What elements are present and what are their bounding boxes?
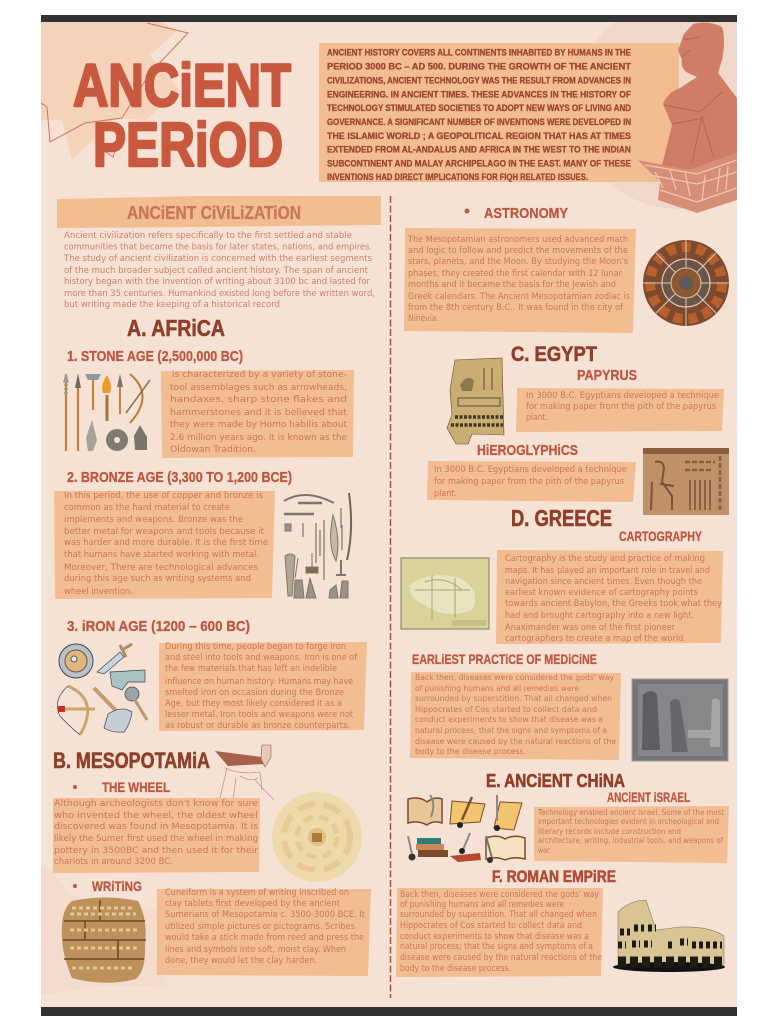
panel: medicine text <box>410 672 621 760</box>
heading: writing: WRiTiNG <box>92 879 142 894</box>
text block: ancient civilization: of the much broader subject called ancient history. The span of ancient <box>64 266 368 276</box>
decorative circle behind statue <box>595 22 737 209</box>
panel: iron age text: influence on human history. Humans may have <box>165 677 353 687</box>
icon: winged bull <box>215 745 274 800</box>
panel: iron age text: lesser metal. Iron tools and weapons were not <box>165 710 354 720</box>
text block: ancient civilization: communities that became the basis for later states, nations, and empires. <box>64 242 372 252</box>
panel: papyrus text: plant. <box>526 413 548 423</box>
panel: papyrus text <box>516 388 724 432</box>
panel: writing text: done, they would let the clay harden. <box>165 956 317 966</box>
heading: astronomy: ASTRONOMY <box>484 205 568 222</box>
panel: writing text: clay tablets first developed by the ancient <box>165 899 341 909</box>
heading: B. Mesopotamia: B. MESOPOTAMiA <box>53 748 210 773</box>
panel: roman empire text: Hippocrates of Cos started to collect data and <box>400 921 582 931</box>
panel: roman empire text: conduct experiments to show that disease was a <box>400 932 589 942</box>
icon: stone tools <box>64 373 150 451</box>
panel: bronze age text <box>54 491 275 599</box>
panel: stone age text: is characterized by a variety of stone- <box>172 370 347 380</box>
title: ANCiENT <box>73 52 291 119</box>
text block: ancient civilization: Ancient civilization refers specifically to the first settled and stable <box>64 231 352 241</box>
panel: introduction: SUBCONTINENT AND MALAY ARCHIPELAGO IN THE EAST. MANY OF THESE <box>327 158 631 168</box>
panel: stone age text <box>161 370 354 458</box>
text block: ancient civilization <box>63 231 375 310</box>
heading: iron age: 3. iRON AGE (1200 – 600 BC) <box>67 618 250 635</box>
panel: medicine text: of punishing humans and all remedies were <box>415 684 579 693</box>
panel: bronze age text: better metal for weapons and tools because it <box>64 527 265 537</box>
decorative leaf shape <box>41 867 170 995</box>
heading: F. Roman Empire: F. ROMAN EMPiRE <box>492 867 616 886</box>
panel: hieroglyphics text <box>427 461 636 502</box>
icon: colosseum <box>613 900 725 972</box>
heading: earliest practice of medicine: EARLiEST PRACTiCE OF MEDiCiNE <box>412 652 597 667</box>
panel: bronze age text: was harder and more durable. It is the first time <box>64 538 268 548</box>
panel: medicine text: body to the disease process. <box>415 747 526 756</box>
panel: roman empire text: surrounded by superstition. That all changed when <box>400 910 597 920</box>
panel: introduction: GOVERNANCE. A SIGNIFICANT NUMBER OF INVENTIONS WERE DEVELOPED IN <box>327 117 631 127</box>
panel: iron age text <box>159 642 367 731</box>
text block: ancient civilization: history began with the invention of writing about 3100 bc and lasted for <box>64 277 370 287</box>
panel: stone age text: 2.6 million years ago. It is known as the <box>170 433 347 443</box>
panel: astronomy text: months and it became the basis for the Jewish and <box>408 280 616 290</box>
panel: astronomy text <box>404 228 636 333</box>
heading: the wheel: THE WHEEL <box>102 780 170 795</box>
panel: astronomy text: and logic to follow and predict the movements of the <box>408 246 628 256</box>
panel: hieroglyphics text: for making paper from the pith of the papyrus <box>434 477 624 487</box>
panel: bronze age text: In this period, the use of copper and bronze is <box>64 491 263 501</box>
panel: hieroglyphics text: In 3000 B.C. Egyptians developed a technique <box>434 465 627 475</box>
panel: astronomy text: Greek calendars. The Ancient Mesopotamian zodiac is <box>408 292 630 302</box>
panel: ancient israel text: literary records include construction and <box>538 827 681 836</box>
panel: astronomy text: Ninevia. <box>408 314 439 324</box>
heading: stone age: 1. STONE AGE (2,500,000 BC) <box>67 348 243 365</box>
heading: A. Africa: A. AFRiCA <box>127 315 225 341</box>
panel: the wheel text: chariots in around 3200 BC. <box>54 857 173 867</box>
icon: medicine relief <box>632 679 728 761</box>
heading: cartography: CARTOGRAPHY <box>619 528 702 544</box>
panel: bronze age text: during this age such as writing systems and <box>64 574 251 584</box>
panel: the wheel text: likely the Sumer first used the wheel in making <box>54 834 258 844</box>
panel: writing text: lines and symbols into soft, moist clay. When <box>165 945 346 955</box>
panel: ancient civilization heading: ANCiENT CiViLiZATiON <box>127 203 301 223</box>
text block: ancient civilization: but writing made the keeping of a historical record <box>64 300 280 310</box>
panel: iron age text: as robust or durable as bronze counterparts. <box>165 721 350 731</box>
panel: stone age text: hammerstones and it is believed that <box>170 408 348 418</box>
heading: C. Egypt: C. EGYPT <box>511 343 597 366</box>
panel: writing text: Sumerians of Mesopotamia c. 3500-3000 BCE. It <box>165 910 366 920</box>
panel: roman empire text: natural process; that the signs and symptoms of a <box>400 942 593 952</box>
title <box>73 52 291 180</box>
panel: the wheel text: who invented the wheel, the oldest wheel <box>54 811 258 821</box>
panel: the wheel text: discovered was found in Mesopotamia. It is <box>54 822 259 832</box>
panel: ancient israel text: important technologies evident in archeological and <box>538 817 719 826</box>
heading: bronze age: 2. BRONZE AGE (3,300 TO 1,200 BCE) <box>67 469 292 486</box>
bottom bar <box>41 1007 737 1016</box>
panel: medicine text: natural process; that the signs and symptoms of a <box>415 726 607 735</box>
panel: cartography text: earliest known evidence of cartography points <box>505 588 698 598</box>
panel: roman empire text: disease were caused by the natural reactions of the <box>400 953 602 963</box>
icon: ancient map <box>401 558 489 629</box>
panel: cartography text: Cartography is the study and practice of making <box>505 554 705 564</box>
panel: writing text <box>157 888 371 976</box>
panel: roman empire text: Back then, diseases were considered the gods' way <box>400 890 599 900</box>
panel: introduction: EXTENDED FROM AL-ANDALUS AND AFRICA IN THE WEST TO THE INDIAN <box>327 144 631 154</box>
icon: hieroglyph relief <box>643 448 729 515</box>
title: PERiOD <box>93 111 283 180</box>
panel: ancient israel text <box>534 806 729 863</box>
panel: iron age text: Age, but they most likely considered it as a <box>165 699 342 709</box>
panel: astronomy text: phases, they created the first calendar with 12 lunar <box>408 269 622 279</box>
icon: papyrus tablet <box>447 358 504 444</box>
panel: stone age text: handaxes, sharp stone flakes and <box>170 395 347 405</box>
panel: introduction: TECHNOLOGY STIMULATED SOCIETIES TO ADOPT NEW WAYS OF LIVING AND <box>327 103 631 113</box>
panel: bronze age text: wheel invention. <box>64 587 133 597</box>
panel: iron age text: smelted iron on occasion during the Bronze <box>165 688 344 698</box>
panel: ancient israel text: architecture, writing, industrial tools, and weapons of <box>538 836 723 845</box>
panel: medicine text: disease were caused by the natural reactions of the <box>415 737 616 746</box>
icon: iron weapons <box>57 644 147 735</box>
panel: introduction: PERIOD 3000 BC – AD 500. DURING THE GROWTH OF THE ANCIENT <box>327 62 632 72</box>
text block: ancient civilization: more than 35 centuries. Humankind existed long before the written word, <box>64 289 375 299</box>
panel: bronze age text: common as the hard material to create <box>64 503 230 513</box>
panel: cartography text: had and brought cartography into a new light. <box>505 611 694 621</box>
heading: the wheel <box>73 780 170 795</box>
panel: bronze age text: Moreover, There are technological advances <box>64 563 258 573</box>
panel: cartography text <box>496 550 723 644</box>
panel: ancient civilization heading <box>57 196 381 228</box>
heading: ancient israel: ANCiENT iSRAEL <box>607 790 690 805</box>
panel: bronze age text: that humans have started working with metal. <box>64 550 259 560</box>
center divider <box>390 196 392 998</box>
panel: medicine text: Hippocrates of Cos started to collect data and <box>415 705 597 714</box>
panel: introduction: ANCIENT HISTORY COVERS ALL CONTINENTS INHABITED BY HUMANS IN THE <box>327 48 631 58</box>
panel: bronze age text: implements and weapons. Bronze was the <box>64 515 243 525</box>
panel: astronomy text: stars, planets, and the Moon. By studying the Moon's <box>408 257 628 267</box>
panel: iron age text: the few materials that has left an indelible <box>165 664 337 674</box>
icon: books and quills <box>408 795 525 863</box>
panel: writing text: would take a stick made from reed and press the <box>165 933 364 943</box>
panel: ancient israel text: Technology enabled ancient Israel. Some of the most <box>537 808 724 817</box>
heading: writing <box>73 879 142 894</box>
panel: writing text: Cuneiform is a system of writing inscribed on <box>165 888 349 898</box>
panel: astronomy text: from the 8th century B.C.. It was found in the city of <box>408 303 624 313</box>
panel: introduction: INVENTIONS HAD DIRECT IMPLICATIONS FOR FIQH RELATED ISSUES. <box>327 172 588 182</box>
panel: roman empire text: body to the disease process. <box>400 964 511 974</box>
panel: cartography text: cartographers to create a map of the world. <box>505 634 686 644</box>
panel: medicine text: conduct experiments to show that disease was a <box>415 715 603 724</box>
panel: cartography text: towards ancient Babylon, the Greeks took what they <box>505 599 722 609</box>
panel: introduction <box>319 43 679 182</box>
panel: roman empire text: of punishing humans and all remedies were <box>400 900 564 910</box>
panel: cartography text: Anaximander was one of the first pioneer <box>505 623 675 633</box>
icon: clay tablet <box>62 898 146 983</box>
panel: papyrus text: for making paper from the pith of the papyrus <box>526 402 716 412</box>
panel: medicine text: Back then, diseases were considered the gods' way <box>415 673 614 682</box>
panel: introduction: ENGINEERING. IN ANCIENT TIMES. THESE ADVANCES IN THE HISTORY OF <box>327 90 631 100</box>
panel: writing text: utilized simple pictures or pictograms. Scribes <box>165 922 355 932</box>
icon: zodiac disc <box>643 240 729 326</box>
panel: roman empire text <box>396 888 603 977</box>
text block: ancient civilization: The study of ancient civilization is concerned with the earliest segments <box>63 254 372 264</box>
icon: bronze tools <box>284 493 351 598</box>
panel: medicine text: surrounded by superstition. That all changed when <box>415 694 612 703</box>
panel: ancient israel text: war. <box>538 846 551 855</box>
heading: papyrus: PAPYRUS <box>577 367 637 384</box>
panel: astronomy text: The Mesopotamian astronomers used advanced math <box>407 235 628 245</box>
heading: E. Ancient China: E. ANCiENT CHiNA <box>486 770 625 791</box>
panel: cartography text: navigation since ancient times. Even though the <box>505 577 702 587</box>
panel: iron age text: and steel into tools and weapons. Iron is one of <box>165 653 358 663</box>
panel: stone age text: tool assemblages such as arrowheads, <box>170 383 347 393</box>
panel: the wheel text <box>53 798 260 873</box>
panel: the wheel text: pottery in 3500BC and then used it for their <box>54 846 258 856</box>
icon: ancient wheel <box>272 792 362 882</box>
panel: introduction: THE ISLAMIC WORLD ; A GEOPOLITICAL REGION THAT HAS AT TIMES <box>327 131 631 141</box>
panel: hieroglyphics text: plant. <box>434 489 457 499</box>
icon: seated statue <box>638 23 737 213</box>
panel: papyrus text: In 3000 B.C. Egyptians developed a technique <box>526 391 719 401</box>
panel: cartography text: maps. It has played an important role in travel and <box>505 566 710 576</box>
panel: the wheel text: Although archeologists don't know for sure <box>54 799 258 809</box>
heading: hieroglyphics: HiEROGLYPHiCS <box>477 443 578 459</box>
top bar <box>41 15 737 22</box>
decorative shape behind title <box>41 22 188 160</box>
heading: D. Greece: D. GREECE <box>511 505 612 531</box>
panel: introduction: CIVILIZATIONS, ANCIENT TECHNOLOGY WAS THE RESULT FROM ADVANCES IN <box>327 76 631 86</box>
panel: stone age text: Oldowan Tradition. <box>170 445 256 455</box>
panel: iron age text: During this time, people began to forge iron <box>165 642 346 652</box>
panel: stone age text: they were made by Homo habilis about <box>170 420 348 430</box>
